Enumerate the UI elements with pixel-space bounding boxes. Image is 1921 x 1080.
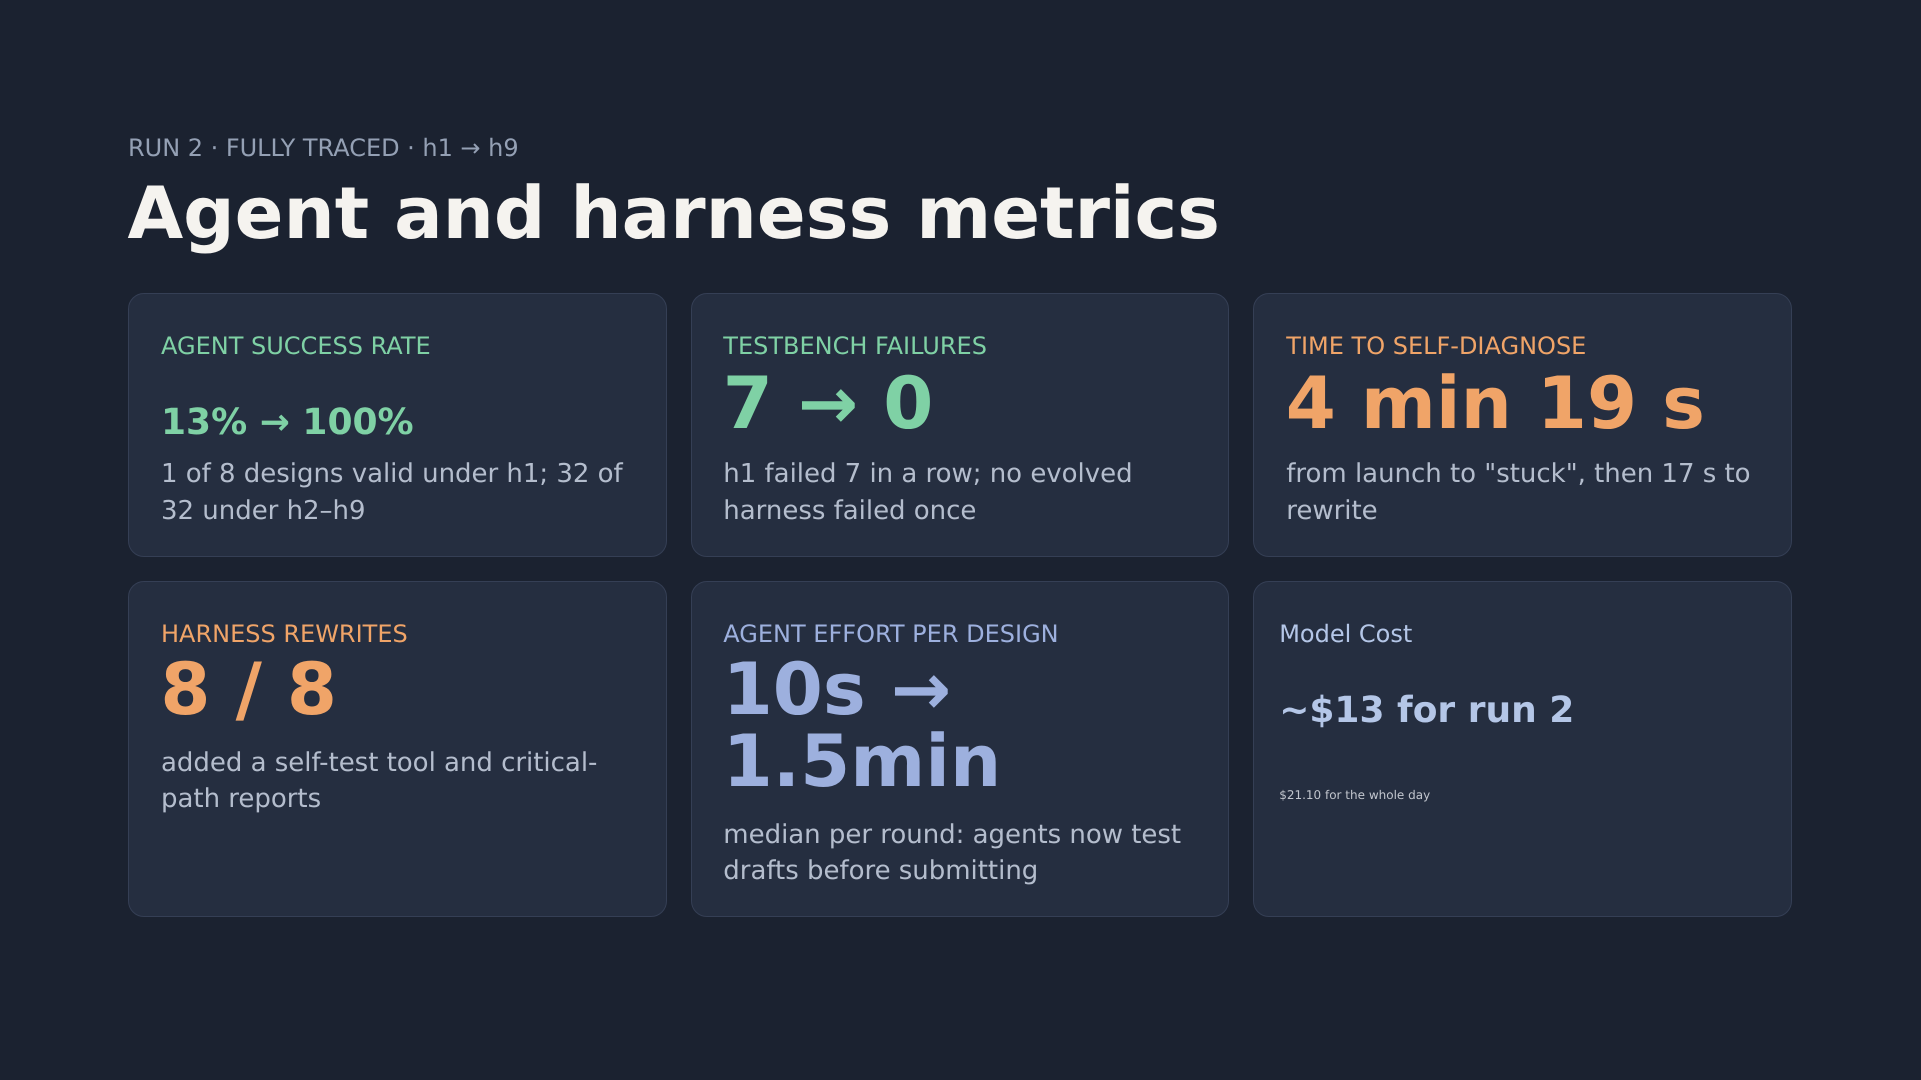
description: harness rewrites: path reports bbox=[161, 784, 321, 814]
description: testbench failures bbox=[723, 459, 1133, 526]
panel: model cost bbox=[1253, 581, 1792, 917]
value: success rate: 13% → 100% bbox=[161, 402, 414, 443]
value: time to self-diagnose: 4 min 19 s bbox=[1286, 360, 1705, 444]
value: harness rewrites: 8 / 8 bbox=[160, 647, 337, 731]
label: testbench failures: TESTBENCH FAILURES bbox=[723, 332, 987, 360]
description: testbench failures: h1 failed 7 in a row; no evolved bbox=[723, 459, 1133, 489]
description: harness rewrites bbox=[161, 748, 597, 814]
value: model cost: ~$13 for run 2 bbox=[1279, 690, 1574, 730]
description: time to self-diagnose bbox=[1286, 459, 1751, 526]
label: model cost: Model Cost bbox=[1279, 620, 1412, 648]
description: testbench failures: harness failed once bbox=[723, 496, 976, 526]
value: agent effort bbox=[723, 647, 1001, 803]
description: success rate: 32 under h2–h9 bbox=[161, 496, 366, 526]
title: Agent and harness metrics bbox=[128, 171, 1220, 255]
note: whole day cost: $21.10 for the whole day bbox=[1279, 788, 1430, 802]
label: harness rewrites: HARNESS REWRITES bbox=[161, 620, 408, 648]
description: agent effort: median per round: agents now test bbox=[723, 820, 1181, 850]
eyebrow: RUN 2 · FULLY TRACED · h1 → h9 bbox=[128, 134, 519, 162]
panel: agent effort per design bbox=[691, 581, 1229, 917]
label: agent success rate: AGENT SUCCESS RATE bbox=[161, 332, 431, 360]
value: agent effort: 1.5min bbox=[723, 719, 1001, 803]
description: agent effort: drafts before submitting bbox=[723, 856, 1038, 886]
description: harness rewrites: added a self-test tool and critical- bbox=[161, 748, 597, 778]
description: success rate bbox=[161, 459, 624, 526]
panel: harness rewrites bbox=[128, 581, 667, 917]
panel: testbench failures bbox=[691, 293, 1229, 557]
panel: time to self-diagnose bbox=[1253, 293, 1792, 557]
label: agent effort per design: AGENT EFFORT PER DESIGN bbox=[723, 620, 1059, 648]
description: agent effort bbox=[723, 820, 1181, 886]
description: time to self-diagnose: rewrite bbox=[1286, 496, 1378, 526]
description: success rate: 1 of 8 designs valid under h1; 32 of bbox=[161, 459, 623, 489]
panel: agent success rate bbox=[128, 293, 667, 557]
value: testbench failures: 7 → 0 bbox=[723, 360, 933, 444]
value: agent effort: 10s → bbox=[723, 647, 951, 731]
label: time to self-diagnose: TIME TO SELF-DIAGNOSE bbox=[1286, 332, 1586, 360]
description: time to self-diagnose: from launch to "stuck", then 17 s to bbox=[1286, 459, 1751, 489]
